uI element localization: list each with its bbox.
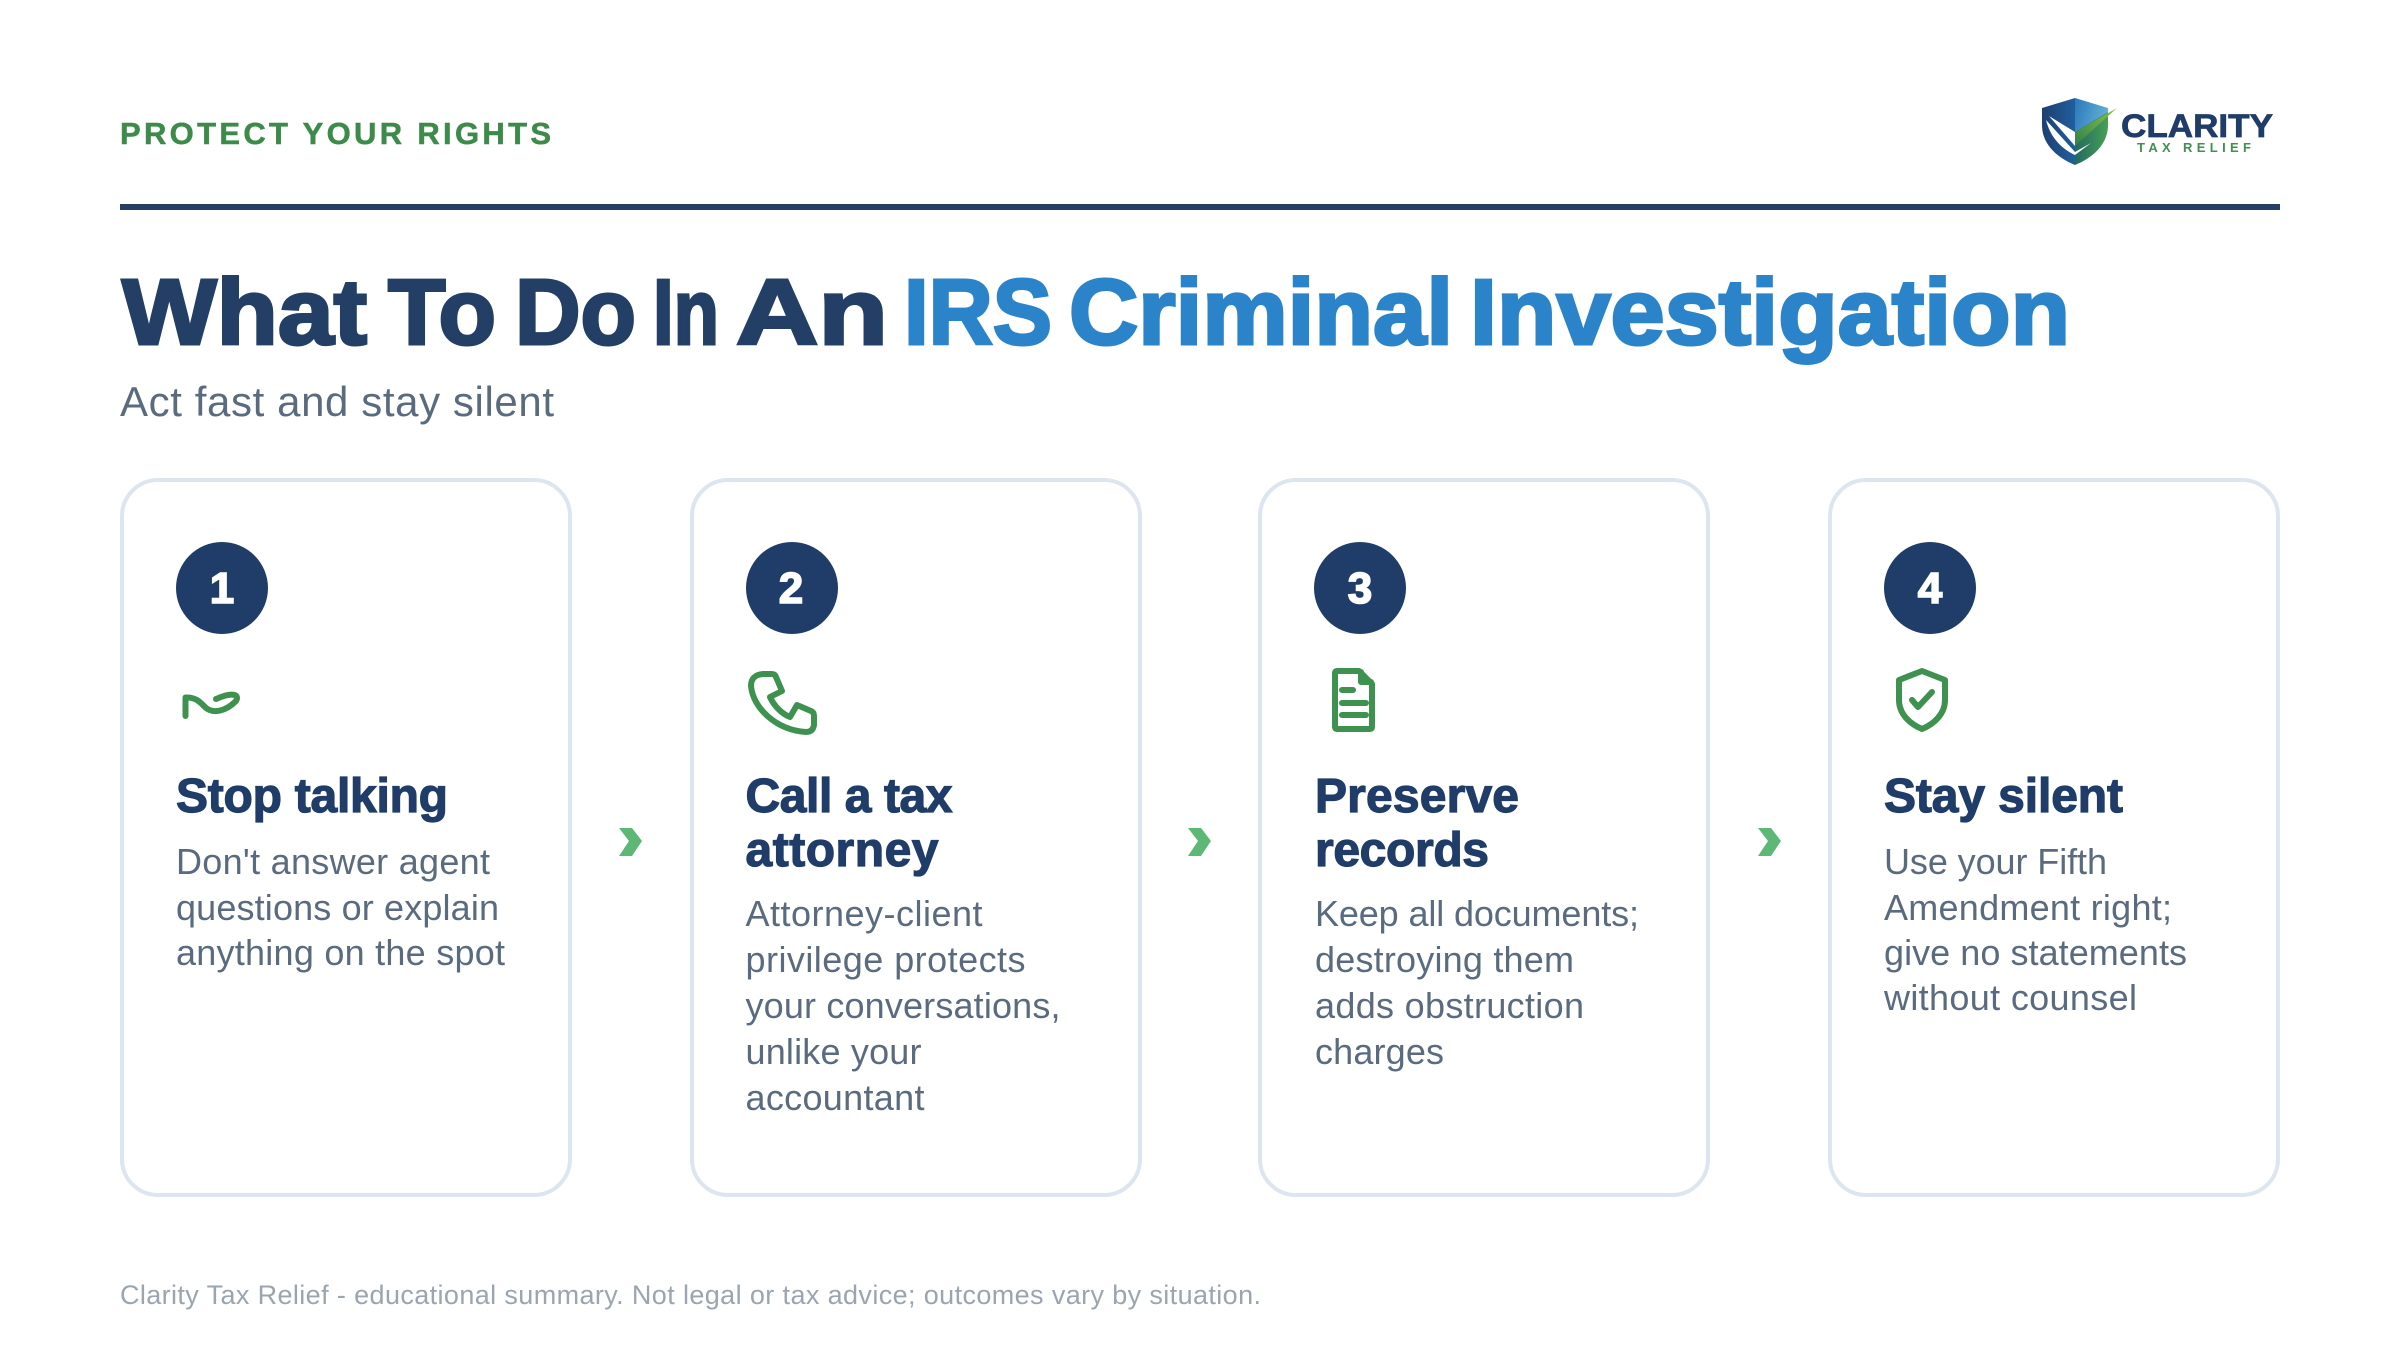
- body text: adds obstruction: [1315, 985, 1584, 1026]
- heading: Preserve: [1315, 770, 1519, 823]
- title: Do: [515, 260, 636, 364]
- step number 4: 4: [1918, 564, 1943, 613]
- body text: [746, 893, 1060, 1118]
- logo: Clarity Tax Relief: [2042, 98, 2273, 165]
- title: Investigation: [1470, 260, 2070, 364]
- eyebrow label: PROTECT YOUR RIGHTS: [120, 116, 551, 151]
- logo shield: [2042, 98, 2117, 165]
- arrow 2 to 3: [1188, 828, 1211, 856]
- body text: unlike your: [746, 1031, 922, 1072]
- icon: phone: [751, 674, 814, 732]
- logo wordmark: CLARITY: [2121, 108, 2273, 144]
- body text: Keep all documents;: [1315, 893, 1639, 934]
- step number 4: [1884, 542, 1976, 634]
- icon: speech squiggle: [186, 695, 237, 716]
- icon: document: [1335, 671, 1372, 729]
- title: Criminal: [1069, 260, 1453, 364]
- body text: give no statements: [1884, 932, 2187, 973]
- header rule: [120, 204, 2280, 210]
- subtitle: Act fast and stay silent: [120, 378, 554, 425]
- title: In: [653, 260, 719, 364]
- heading: Stop talking: [176, 770, 448, 823]
- title: To: [388, 260, 496, 364]
- footer disclaimer: Clarity Tax Relief - educational summary. Not legal or tax advice; outcomes vary by situation.: [120, 1280, 1261, 1310]
- step number 1: [176, 542, 268, 634]
- body text: charges: [1315, 1031, 1444, 1072]
- heading: attorney: [746, 824, 939, 877]
- heading: [746, 770, 953, 877]
- step number 3: [1314, 542, 1406, 634]
- body text: anything on the spot: [176, 932, 505, 973]
- icon: shield check: [1899, 671, 1945, 729]
- body text: destroying them: [1315, 939, 1574, 980]
- heading: Stay silent: [1884, 770, 2123, 823]
- heading: [1315, 770, 1519, 877]
- heading: Call a tax: [746, 770, 953, 823]
- body text: questions or explain: [176, 887, 499, 928]
- body text: privilege protects: [746, 939, 1026, 980]
- logo tagline: TAX RELIEF: [2137, 140, 2251, 155]
- title: An: [736, 260, 888, 364]
- title: [122, 260, 2070, 364]
- arrow 1 to 2: [619, 828, 642, 856]
- body text: Don't answer agent: [176, 841, 490, 882]
- heading: records: [1315, 824, 1489, 877]
- body text: Use your Fifth: [1884, 841, 2107, 882]
- step number 2: 2: [779, 564, 803, 613]
- step number 1: 1: [210, 564, 234, 613]
- panel: step 4 stay silent: [1830, 480, 2278, 1195]
- arrow 3 to 4: [1758, 828, 1781, 856]
- body text: Attorney-client: [746, 893, 982, 934]
- body text: accountant: [746, 1077, 924, 1118]
- step number 3: 3: [1348, 564, 1372, 613]
- body text: your conversations,: [746, 985, 1060, 1026]
- panel: step 1 stop talking: [122, 480, 570, 1195]
- body text: [1315, 893, 1639, 1072]
- title: IRS: [904, 260, 1052, 364]
- body text: without counsel: [1883, 977, 2137, 1018]
- title: What: [122, 260, 367, 364]
- step number 2: [746, 542, 838, 634]
- panel: step 3 preserve records: [1260, 480, 1708, 1195]
- body text: [1883, 841, 2187, 1018]
- body text: Amendment right;: [1884, 887, 2172, 928]
- panel: step 2 call a tax attorney: [692, 480, 1140, 1195]
- body text: [176, 841, 505, 973]
